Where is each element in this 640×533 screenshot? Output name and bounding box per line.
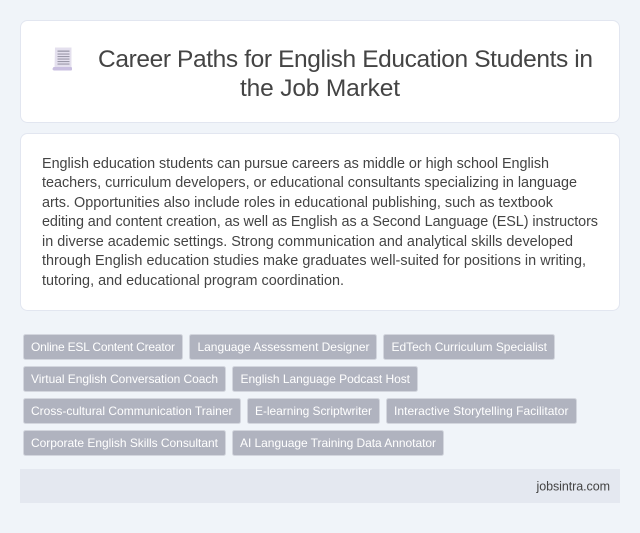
tag bbox=[232, 430, 444, 456]
icon: document scroll bbox=[52, 48, 72, 70]
tag: E-learning Scriptwriter bbox=[255, 404, 372, 418]
tag: Interactive Storytelling Facilitator bbox=[394, 404, 568, 418]
tag bbox=[24, 334, 182, 360]
tag bbox=[24, 366, 226, 392]
tag: Cross-cultural Communication Trainer bbox=[31, 404, 232, 418]
tag bbox=[24, 398, 240, 424]
tag: Corporate English Skills Consultant bbox=[31, 436, 219, 450]
tag bbox=[24, 430, 226, 456]
text block: description: teachers, curriculum developers, or educational consultants specializing in language bbox=[42, 175, 577, 191]
panel: description card bbox=[20, 134, 620, 310]
tag: EdTech Curriculum Specialist bbox=[392, 340, 548, 354]
tag: AI Language Training Data Annotator bbox=[240, 436, 436, 450]
tag bbox=[384, 334, 554, 360]
title: Career Paths for English Education Students in bbox=[98, 46, 593, 73]
tag: Online ESL Content Creator bbox=[31, 340, 175, 354]
footer bbox=[20, 469, 620, 503]
panel: header card bbox=[20, 20, 620, 122]
tag list bbox=[24, 334, 576, 456]
tag: English Language Podcast Host bbox=[240, 372, 411, 386]
title: the Job Market bbox=[240, 75, 400, 102]
text block: description: tutoring, and educational program coordination. bbox=[42, 273, 344, 289]
text block: description: in diverse academic settings. Strong communication and analytical skills developed bbox=[42, 234, 573, 250]
text block: description: arts. Opportunities also include roles in educational publishing, such as textbook bbox=[42, 195, 554, 211]
text block: description: editing and content creation, as well as English as a Second Language (ESL) instructors bbox=[42, 214, 598, 230]
tag bbox=[248, 398, 380, 424]
tag bbox=[386, 398, 576, 424]
tag: Virtual English Conversation Coach bbox=[31, 372, 218, 386]
text block: description: English education students can pursue careers as middle or high school English bbox=[42, 156, 549, 172]
tag bbox=[190, 334, 376, 360]
text block: description: through English education studies make graduates well-suited for positions in writing, bbox=[42, 253, 586, 269]
title bbox=[98, 46, 593, 102]
tag bbox=[232, 366, 418, 392]
footer: jobsintra.com bbox=[536, 480, 610, 494]
text block: description bbox=[42, 156, 598, 289]
tag: Language Assessment Designer bbox=[198, 340, 370, 354]
